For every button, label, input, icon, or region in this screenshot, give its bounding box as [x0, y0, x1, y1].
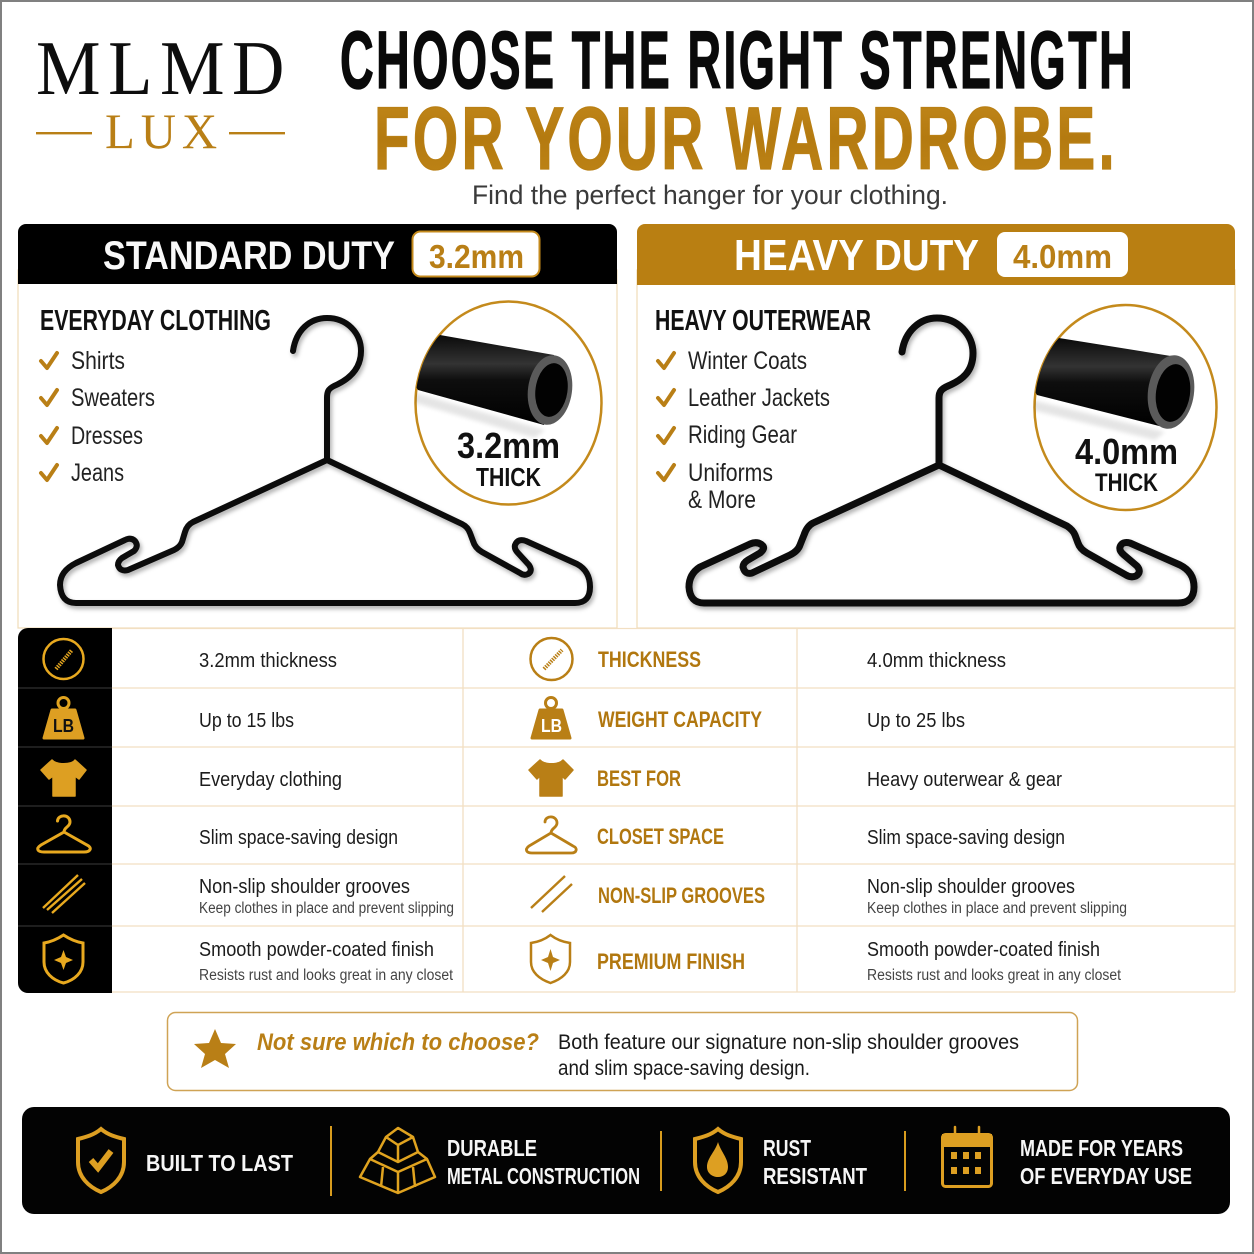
icon: shield gold: [531, 935, 570, 983]
heavy values: Non-slip shoulder grooves: [867, 876, 1075, 898]
standard heading and checklist: EVERYDAY CLOTHING: [40, 305, 271, 337]
icon: weight: [44, 698, 83, 738]
feature labels with icons: THICKNESS: [598, 647, 701, 672]
panel: heavy duty: [637, 224, 1235, 628]
icon: weight gold: LB: [541, 716, 562, 736]
icon: shield: [44, 935, 83, 983]
standard values: [199, 650, 454, 984]
icon: grooves gold: [531, 876, 572, 912]
icon: shield check: [78, 1129, 124, 1192]
logo: [36, 25, 292, 159]
subtitle: Find the perfect hanger for your clothing.: [472, 180, 948, 210]
heavy values: Resists rust and looks great in any closet: [867, 967, 1122, 984]
standard heading and checklist: Dresses: [71, 422, 143, 450]
standard heading and checklist: [40, 305, 271, 487]
callout: 3.2mm tube: 3.2mm: [457, 425, 560, 466]
standard values: Up to 15 lbs: [199, 710, 294, 732]
standard duty header: STANDARD DUTY: [103, 234, 395, 278]
hanger: heavy: [689, 318, 1196, 606]
comparison table: [18, 628, 1235, 993]
icon: shirt gold: [529, 760, 573, 796]
heavy heading and checklist: [655, 305, 871, 514]
icon: calendar: [942, 1127, 992, 1186]
footer benefits bar: MADE FOR YEARS: [1020, 1135, 1183, 1161]
feature labels with icons: NON-SLIP GROOVES: [598, 883, 765, 908]
heavy values: Up to 25 lbs: [867, 710, 965, 732]
icon: grooves: [43, 875, 85, 913]
footer benefits bar: DURABLE: [447, 1135, 537, 1161]
icon: shield water drop: [695, 1129, 741, 1192]
standard duty header: [18, 224, 617, 284]
feature labels with icons: WEIGHT CAPACITY: [598, 707, 762, 732]
feature labels with icons: BEST FOR: [597, 766, 681, 791]
feature labels with icons: [526, 638, 765, 983]
footer benefits bar: BUILT TO LAST: [146, 1150, 293, 1176]
logo: LUX: [105, 103, 223, 159]
icon: thickness: [44, 639, 84, 679]
standard values: Slim space-saving design: [199, 827, 398, 849]
standard heading and checklist: Sweaters: [71, 384, 155, 412]
standard values: Resists rust and looks great in any closet: [199, 967, 454, 984]
callout: 3.2mm tube: THICK: [476, 462, 541, 492]
callout: not sure: Both feature our signature non-slip shoulder grooves: [558, 1031, 1019, 1054]
panel: standard duty: [18, 224, 617, 628]
heavy heading and checklist: & More: [688, 486, 756, 514]
heavy values: Smooth powder-coated finish: [867, 939, 1100, 961]
heavy heading and checklist: Riding Gear: [688, 421, 797, 449]
icon: hanger gold: [526, 817, 576, 853]
icon: metal blocks: [360, 1128, 435, 1193]
hanger: standard: [60, 318, 592, 606]
heavy heading and checklist: Winter Coats: [688, 347, 807, 375]
icon: weight gold: [532, 698, 570, 738]
footer benefits bar: METAL CONSTRUCTION: [447, 1163, 640, 1189]
heavy duty header: HEAVY DUTY: [734, 231, 979, 280]
standard values: 3.2mm thickness: [199, 650, 337, 672]
callout: 4.0mm tube: [1025, 305, 1216, 510]
standard values: Keep clothes in place and prevent slipping: [199, 900, 454, 917]
icon: weight: LB: [53, 716, 74, 736]
left icon column: [18, 628, 112, 993]
footer benefits bar: OF EVERYDAY USE: [1020, 1163, 1192, 1189]
footer benefits bar: RESISTANT: [763, 1163, 867, 1189]
callout: 3.2mm tube: [405, 302, 602, 504]
callout: 4.0mm tube: THICK: [1095, 469, 1158, 497]
callout: not sure: [168, 1012, 1078, 1090]
callout: 4.0mm tube: 4.0mm: [1075, 431, 1178, 472]
icon: hanger: [38, 816, 90, 852]
heavy values: [867, 650, 1127, 984]
footer benefits bar: RUST: [763, 1135, 811, 1161]
logo: MLMD: [36, 25, 292, 111]
feature labels with icons: PREMIUM FINISH: [597, 949, 745, 974]
callout: not sure: Not sure which to choose?: [257, 1029, 539, 1056]
standard heading and checklist: Shirts: [71, 347, 125, 375]
standard values: Everyday clothing: [199, 769, 342, 791]
heavy values: Keep clothes in place and prevent slipping: [867, 900, 1127, 917]
heavy heading and checklist: Leather Jackets: [688, 384, 830, 412]
heavy values: Heavy outerwear & gear: [867, 769, 1062, 791]
standard heading and checklist: Jeans: [71, 459, 124, 487]
feature labels with icons: CLOSET SPACE: [597, 824, 724, 849]
icon: thickness gold: [530, 638, 572, 680]
icon: star: [194, 1029, 236, 1068]
standard values: Non-slip shoulder grooves: [199, 876, 410, 898]
footer benefits bar: [22, 1107, 1230, 1214]
heavy duty header: 4.0mm: [1013, 238, 1112, 275]
heavy heading and checklist: HEAVY OUTERWEAR: [655, 305, 871, 337]
heavy duty header: [637, 224, 1235, 285]
heavy values: Slim space-saving design: [867, 827, 1065, 849]
heavy heading and checklist: Uniforms: [688, 459, 773, 487]
standard duty header: 3.2mm: [429, 238, 524, 275]
heavy values: 4.0mm thickness: [867, 650, 1006, 672]
title: [340, 15, 1135, 188]
standard values: Smooth powder-coated finish: [199, 939, 434, 961]
callout: not sure: and slim space-saving design.: [558, 1057, 810, 1080]
icon: shirt: [41, 760, 86, 796]
